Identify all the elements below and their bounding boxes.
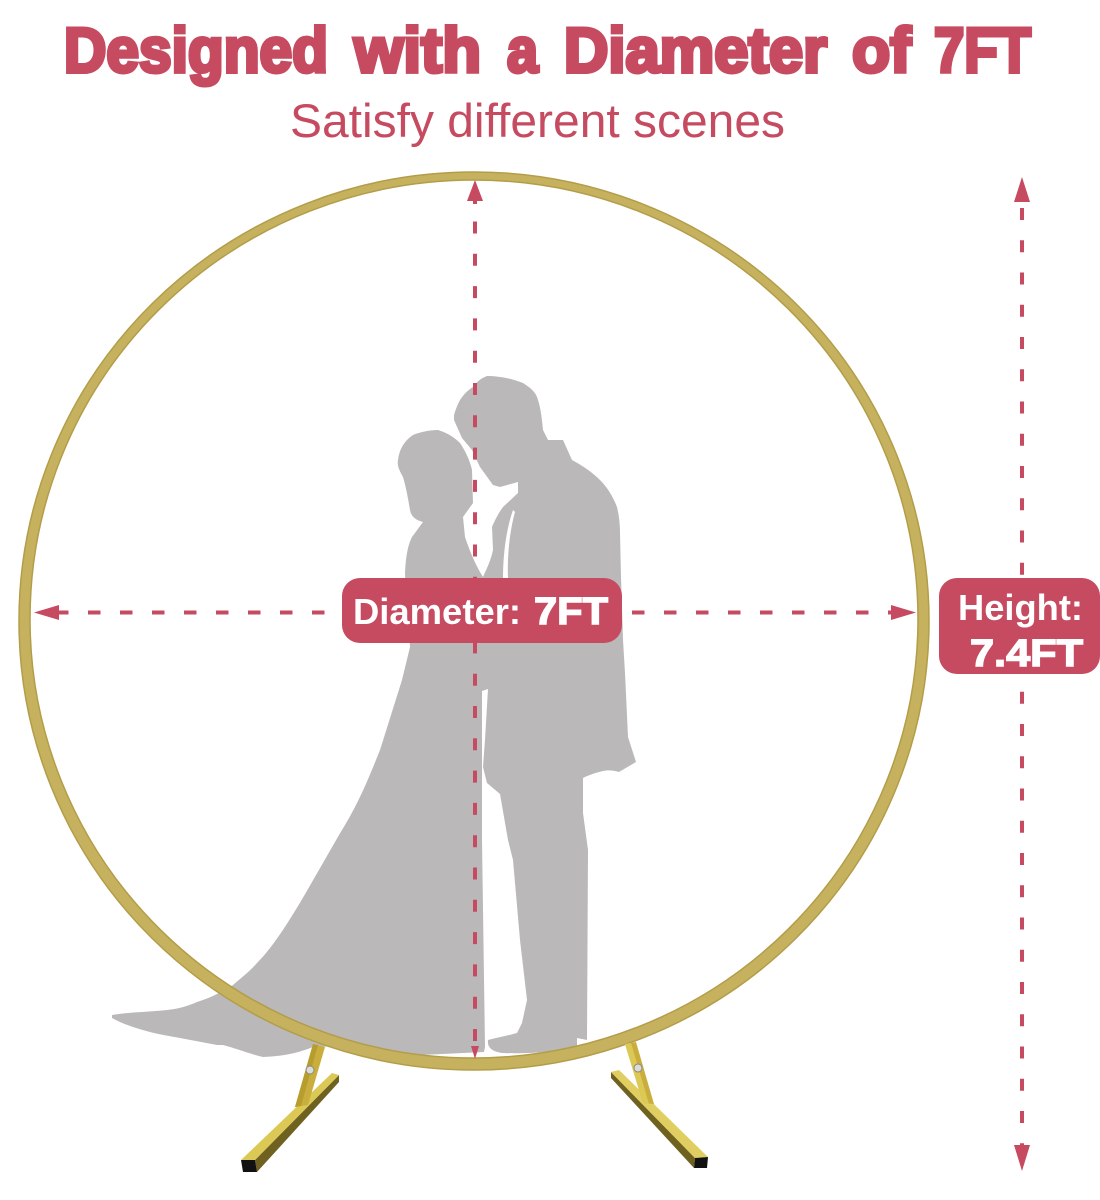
arrow: height — [1014, 177, 1030, 1171]
arrow: vertical diameter — [467, 180, 483, 1059]
ring: gold hoop — [19, 172, 929, 1070]
left stand — [241, 1044, 339, 1172]
title: Diameter — [564, 16, 827, 86]
subtitle: Satisfy different scenes — [290, 94, 785, 147]
badge: diameter: Diameter: — [353, 591, 521, 632]
title: a — [507, 16, 539, 86]
badge: height: 7.4FT — [970, 633, 1083, 675]
badge: height — [939, 578, 1100, 675]
silhouette: couple — [112, 376, 636, 1057]
badge: diameter: 7FT — [534, 591, 608, 633]
title: of — [852, 16, 912, 86]
title — [64, 16, 1031, 86]
right stand — [611, 1042, 708, 1168]
arrow: horizontal diameter — [34, 605, 916, 620]
badge: diameter — [342, 578, 622, 643]
title: 7FT — [934, 16, 1031, 86]
title: Designed — [64, 16, 328, 86]
badge: height: Height: — [958, 587, 1083, 628]
title: with — [353, 16, 481, 86]
